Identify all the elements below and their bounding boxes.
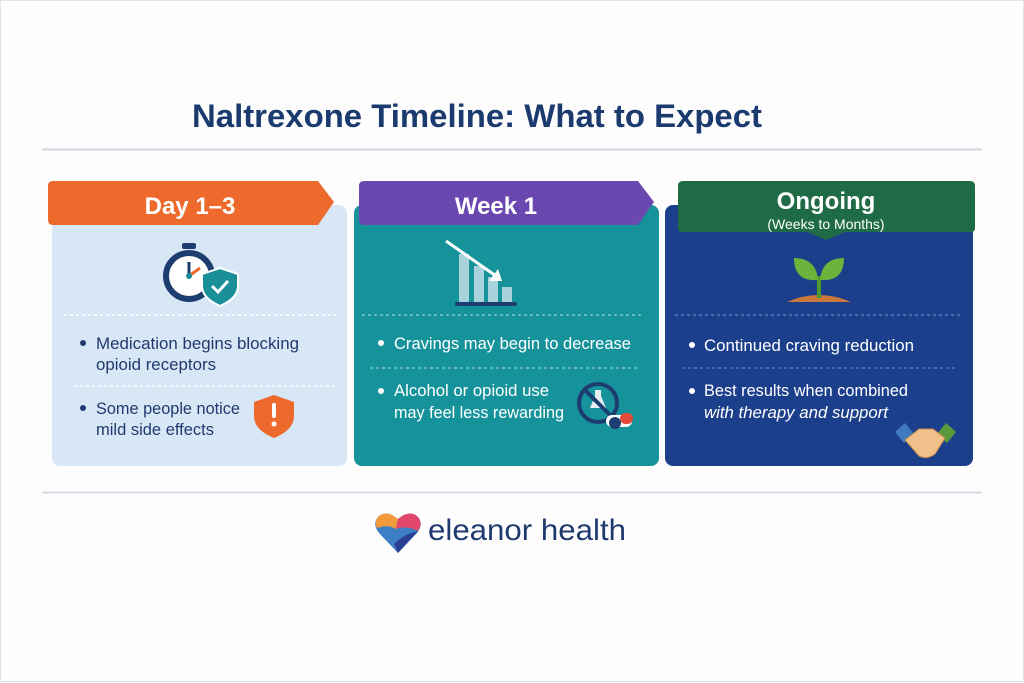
logo: eleanor health: eleanor health xyxy=(428,514,626,547)
text: bullet 2: may feel less rewarding xyxy=(394,404,564,422)
icon: declining bar chart xyxy=(446,241,517,306)
icon: heart logo xyxy=(375,513,421,553)
text: bullet 2: Best results when combined xyxy=(704,382,908,400)
header: ongoing: (Weeks to Months) xyxy=(767,216,885,232)
header: ongoing xyxy=(678,181,975,240)
text: bullet 2 xyxy=(689,382,908,422)
header: week 1: Week 1 xyxy=(455,193,537,220)
icon: no substances xyxy=(579,384,633,429)
text: bullet 1: Cravings may begin to decrease xyxy=(394,335,631,353)
panel: week 1 xyxy=(354,181,659,466)
header: day 1-3 xyxy=(48,181,334,225)
icon: warning shield xyxy=(254,395,294,438)
icon: stopwatch with shield xyxy=(166,243,238,306)
panel: day 1-3 xyxy=(48,181,347,466)
text: bullet 2: mild side effects xyxy=(96,421,214,439)
icon: sprout xyxy=(787,258,851,302)
icon: handshake xyxy=(895,423,956,458)
text: bullet 2 xyxy=(80,400,240,439)
logo: eleanor health xyxy=(375,513,626,553)
text: bullet 1: Continued craving reduction xyxy=(704,337,914,355)
panel: ongoing xyxy=(665,181,975,466)
text: bullet 2: Alcohol or opioid use xyxy=(394,382,549,400)
header: week 1 xyxy=(359,181,654,225)
text: bullet 1: opioid receptors xyxy=(96,356,216,374)
title: Naltrexone Timeline: What to Expect xyxy=(192,98,762,134)
header: ongoing: Ongoing xyxy=(777,188,875,215)
text: bullet 1 xyxy=(80,335,299,374)
header: day 1-3: Day 1–3 xyxy=(145,193,235,220)
text: bullet 1: Medication begins blocking xyxy=(96,335,299,353)
text: bullet 2: with therapy and support xyxy=(704,404,889,422)
text: bullet 2: Some people notice xyxy=(96,400,240,418)
text: bullet 2 xyxy=(378,382,564,422)
